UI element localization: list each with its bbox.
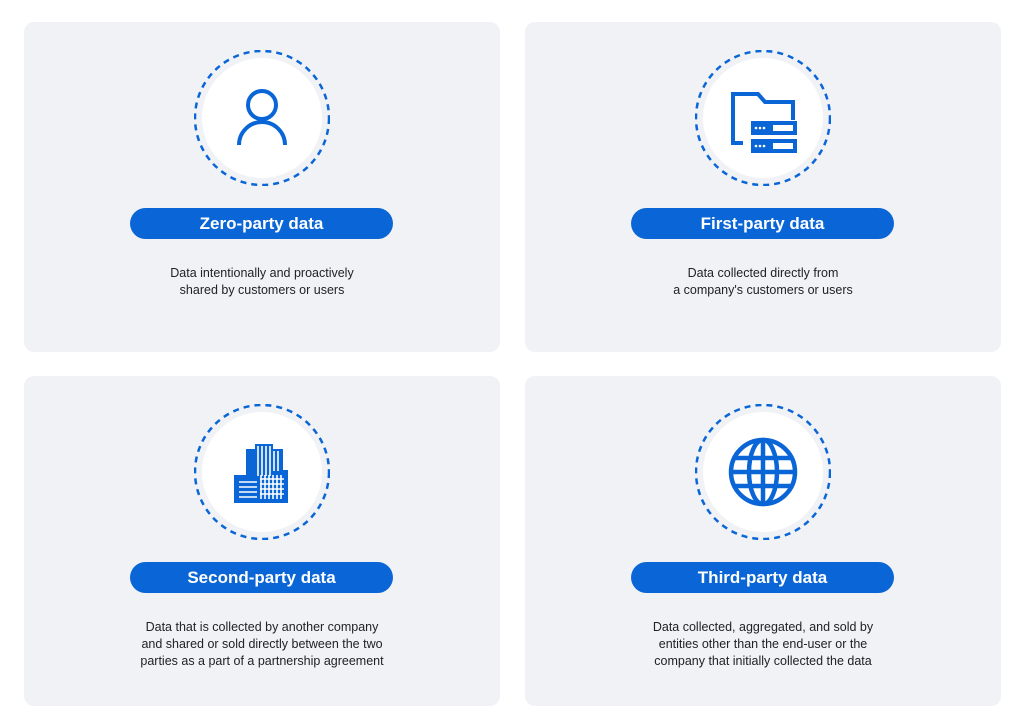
- heading: [130, 208, 393, 239]
- heading: [631, 562, 894, 593]
- panel: first-party: [525, 22, 1001, 352]
- description: shared by customers or users: [180, 283, 344, 297]
- heading: Third-party data: [698, 568, 827, 587]
- description: [653, 620, 874, 668]
- heading: First-party data: [701, 214, 824, 233]
- heading: [631, 208, 894, 239]
- description: a company's customers or users: [673, 283, 853, 297]
- icon: globe: [695, 404, 831, 540]
- panel: third-party: [525, 376, 1001, 706]
- icon: person: [194, 50, 330, 186]
- heading: [130, 562, 393, 593]
- heading: Second-party data: [187, 568, 336, 587]
- panel: second-party: [24, 376, 500, 706]
- description: company that initially collected the data: [654, 654, 872, 668]
- description: Data intentionally and proactively: [170, 266, 354, 280]
- description: [140, 620, 384, 668]
- description: Data collected, aggregated, and sold by: [653, 620, 873, 634]
- icon: folder with servers: [695, 50, 831, 186]
- description: entities other than the end-user or the: [659, 637, 867, 651]
- description: and shared or sold directly between the two: [141, 637, 383, 651]
- heading: Zero-party data: [200, 214, 323, 233]
- description: [673, 266, 853, 297]
- description: parties as a part of a partnership agreement: [140, 654, 384, 668]
- icon: buildings: [194, 404, 330, 540]
- description: Data that is collected by another company: [146, 620, 378, 634]
- panel: zero-party: [24, 22, 500, 352]
- description: [170, 266, 354, 297]
- description: Data collected directly from: [688, 266, 838, 280]
